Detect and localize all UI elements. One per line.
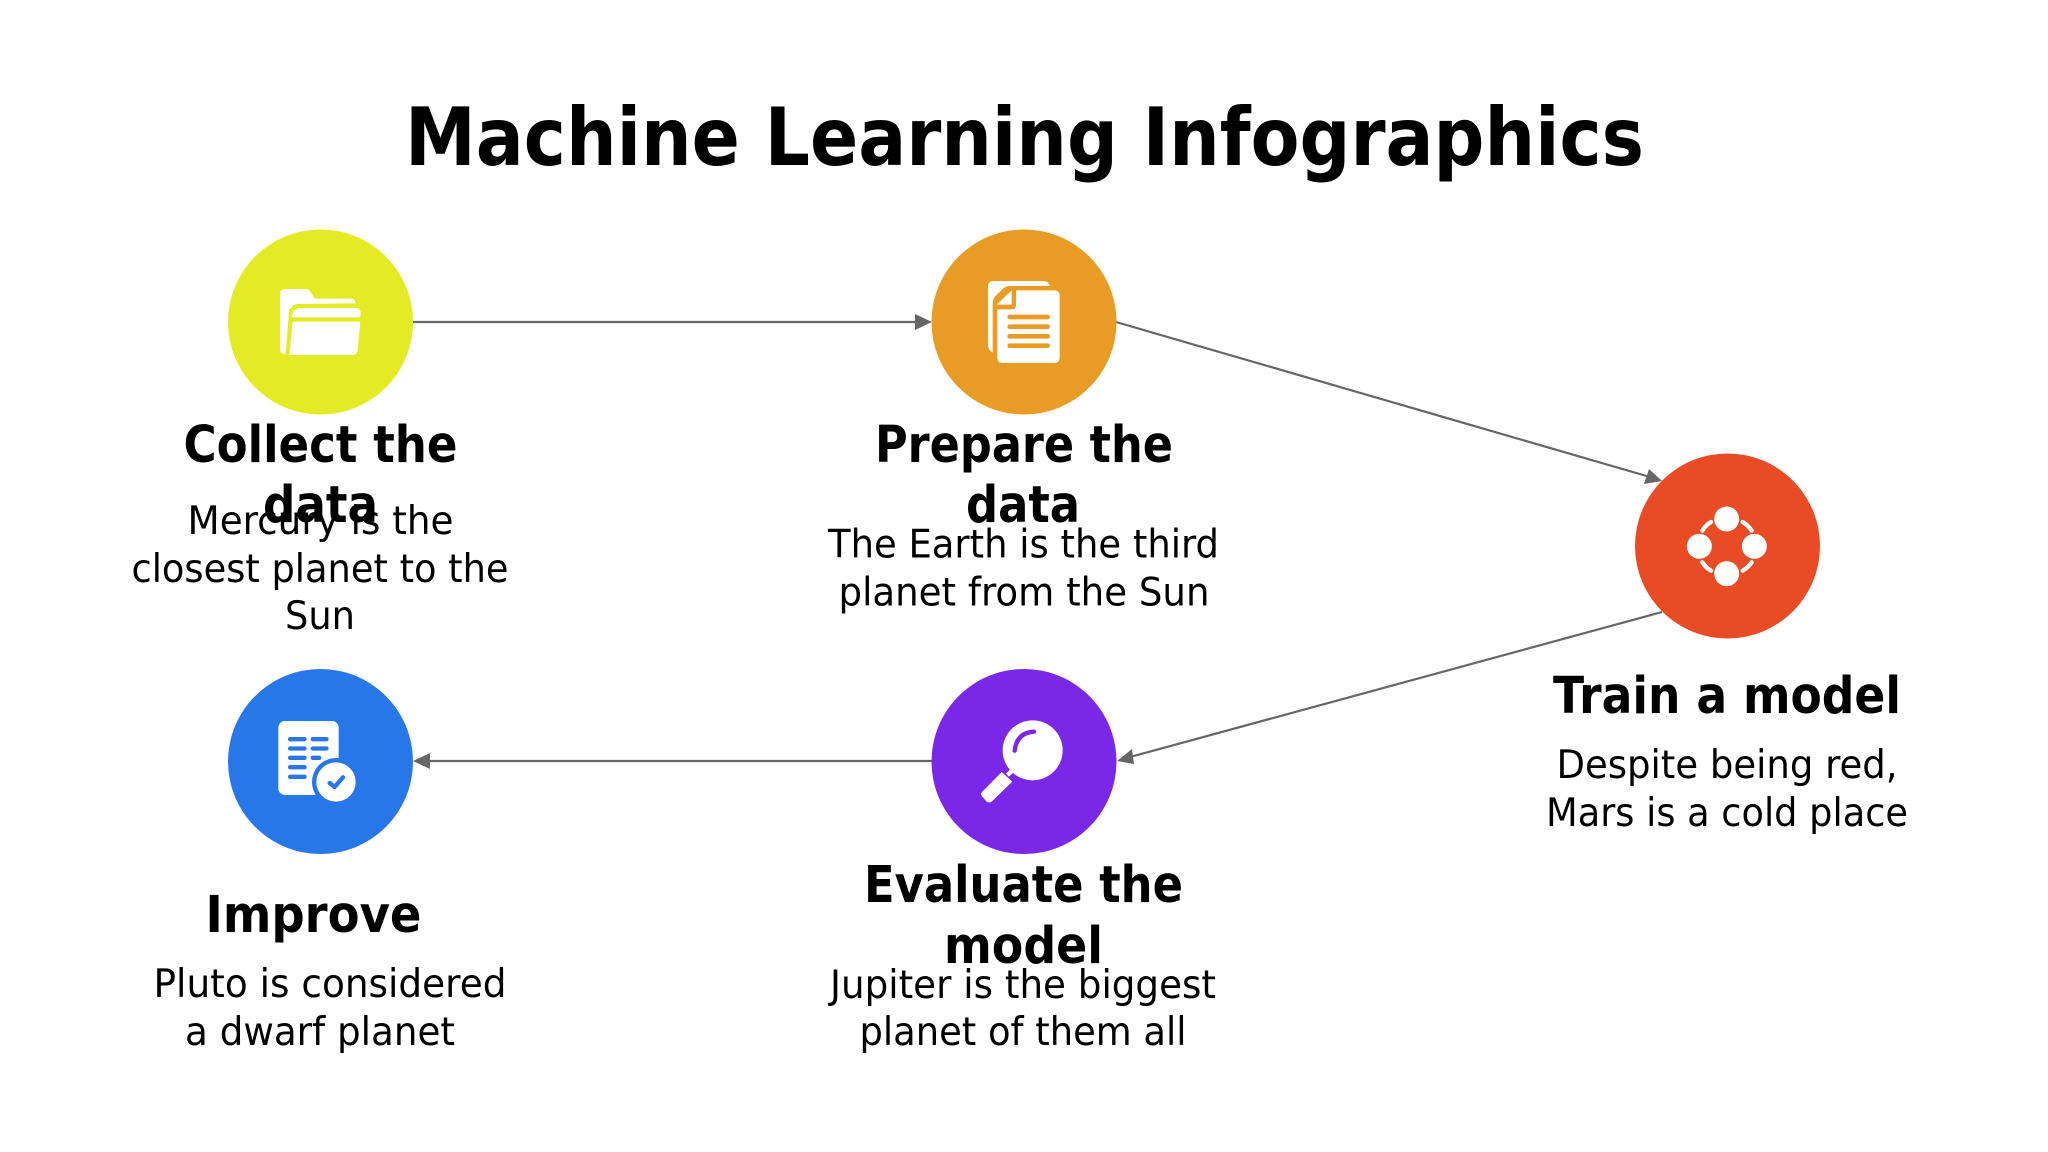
description — [827, 522, 1219, 616]
title: Machine Learning Infographics — [405, 91, 1644, 184]
description: a dwarf planet — [185, 1009, 455, 1055]
heading: Train a model — [1553, 667, 1901, 726]
description: Mars is a cold place — [1546, 790, 1908, 836]
heading — [864, 856, 1183, 976]
arrow: evaluate to improve — [413, 753, 932, 769]
panel: collect the data — [132, 230, 508, 639]
circle: yellow — [228, 230, 413, 414]
heading: Prepare the — [875, 416, 1173, 475]
description: planet from the Sun — [838, 570, 1210, 616]
icon: document — [988, 281, 1060, 363]
description: Despite being red, — [1556, 742, 1898, 788]
description — [132, 498, 508, 639]
heading — [184, 416, 458, 535]
description — [827, 962, 1216, 1055]
icon: magnifier — [981, 720, 1063, 802]
heading: Evaluate the — [864, 856, 1183, 915]
icon: folder — [280, 289, 361, 355]
heading: model — [944, 917, 1103, 976]
heading: data — [966, 476, 1080, 535]
circle: purple — [932, 669, 1116, 854]
heading — [875, 416, 1173, 535]
arrow: prepare to train — [1116, 322, 1662, 484]
description: Mercury is the — [188, 498, 454, 544]
arrow: collect to prepare — [413, 314, 932, 330]
description — [1546, 742, 1908, 836]
heading: Improve — [206, 886, 422, 945]
icon: checklist — [278, 721, 360, 806]
description: closest planet to the — [132, 546, 508, 592]
heading: Collect the — [184, 416, 458, 475]
arrow: train to evaluate — [1117, 612, 1662, 764]
panel: evaluate the model — [827, 669, 1216, 1055]
panel: improve — [154, 669, 506, 1055]
description: Pluto is considered — [154, 961, 506, 1007]
panel: prepare the data — [827, 230, 1219, 616]
icon: network — [1687, 506, 1767, 586]
heading: data — [263, 476, 378, 535]
circle: red — [1635, 454, 1820, 638]
description: The Earth is the third — [827, 522, 1219, 568]
panel: train a model — [1546, 454, 1908, 836]
description: planet of them all — [860, 1009, 1186, 1055]
description: Jupiter is the biggest — [827, 962, 1216, 1008]
circle: blue — [228, 669, 413, 854]
description: Sun — [285, 593, 355, 639]
description — [154, 961, 506, 1055]
circle: orange — [932, 230, 1116, 414]
